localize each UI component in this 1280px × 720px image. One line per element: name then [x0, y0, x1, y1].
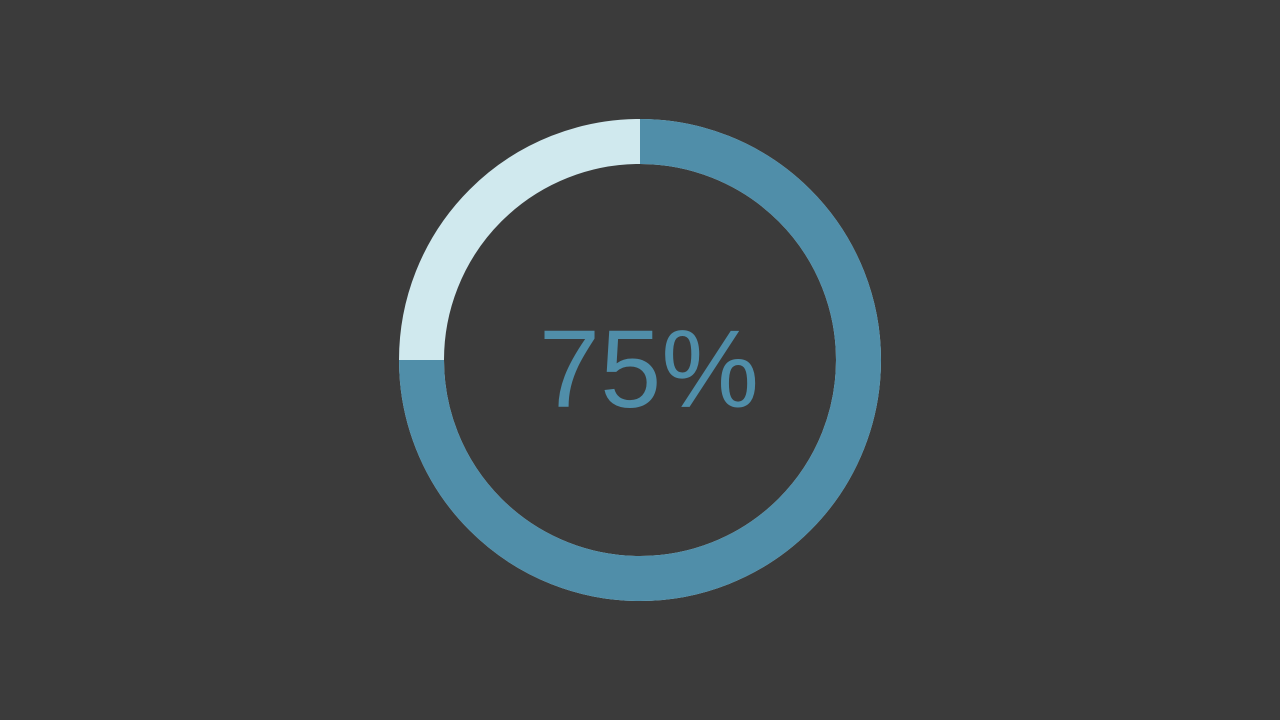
- percentage label: 75%: [539, 308, 759, 431]
- ring track: remaining 25%: [422, 142, 858, 578]
- ring progress: 75%: [422, 142, 858, 578]
